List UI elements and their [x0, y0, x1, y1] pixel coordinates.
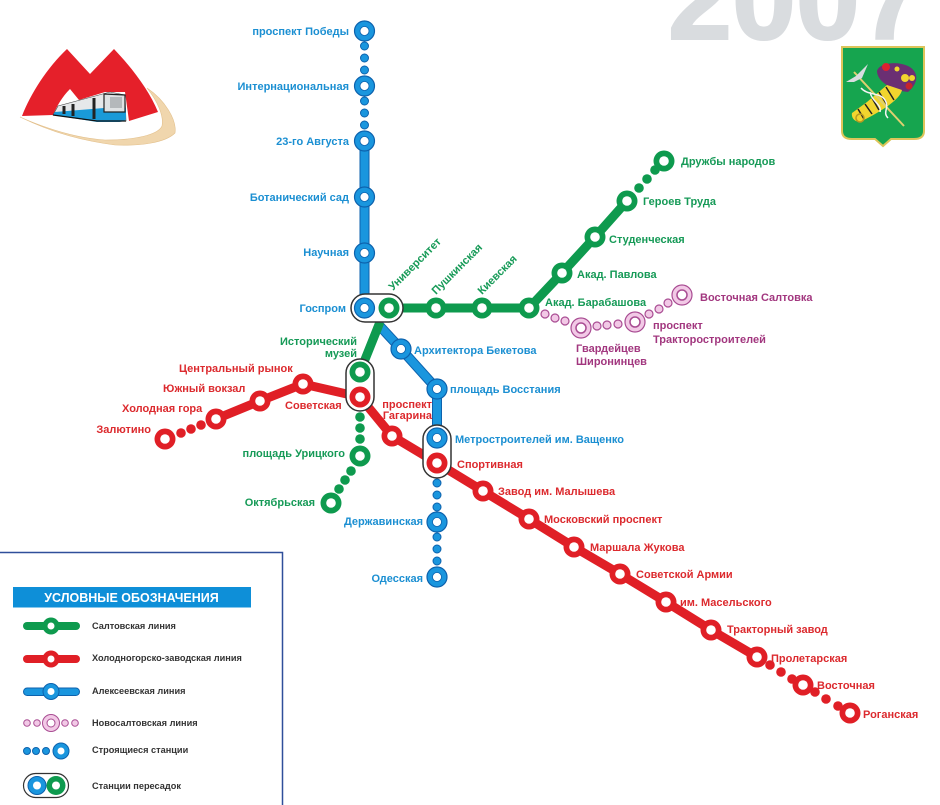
- station labels: pink line: Гвардейцев: [576, 343, 641, 355]
- legend: interchange stations: Станции пересадок: [92, 781, 181, 791]
- station labels: pink line: [576, 292, 813, 368]
- coat of arms of Kharkiv: [842, 47, 924, 146]
- station labels: green line: Студенческая: [609, 234, 685, 246]
- station labels: red line: Маршала Жукова: [590, 542, 685, 554]
- station labels: blue line: Интернациональная: [238, 81, 349, 93]
- station labels: red line: Роганская: [863, 709, 918, 721]
- interchange: Gosprom – Universitet: [351, 294, 403, 322]
- station labels: red line: им. Масельского: [680, 597, 772, 609]
- station labels: green line: Киевская: [476, 253, 520, 297]
- station labels: green line: [243, 156, 775, 509]
- station labels: red line: Залютино: [96, 424, 151, 436]
- station labels: red line: Советская: [285, 400, 342, 412]
- station labels: red line: Завод им. Малышева: [498, 486, 616, 498]
- line: Kholodnogorsko-Zavodskaya (red): [154, 374, 860, 724]
- station labels: red line: [96, 363, 918, 721]
- station labels: pink line: Восточная Салтовка: [700, 292, 813, 304]
- station labels: pink line: Широнинцев: [576, 356, 647, 368]
- legend: Novosaltovskaya line: Новосалтовская линия: [92, 718, 198, 728]
- station labels: pink line: Тракторостроителей: [653, 334, 766, 346]
- interchange: Metrostroiteley – Sportivnaya: [423, 425, 451, 478]
- station labels: green line: музей: [325, 348, 357, 360]
- station labels: red line: Спортивная: [457, 459, 523, 471]
- legend: Kholodnogorsko-Zavodskaya line: Холодногорско-заводская линия: [92, 653, 242, 663]
- station labels: blue line: [238, 26, 624, 585]
- station labels: red line: Московский проспект: [544, 514, 663, 526]
- logo swoosh: [20, 88, 175, 145]
- line: Saltovskaya (green): [320, 150, 674, 514]
- station labels: red line: проспект: [382, 399, 433, 411]
- station labels: red line: Пролетарская: [771, 653, 847, 665]
- legend heading: УСЛОВНЫЕ ОБОЗНАЧЕНИЯ: [44, 591, 219, 605]
- legend: Kholodnogorsko-Zavodskaya line: [23, 650, 242, 668]
- cornucopia: [852, 85, 902, 122]
- station labels: green line: Октябрьская: [245, 497, 315, 509]
- legend: Alekseevskaya line: Алексеевская линия: [92, 686, 185, 696]
- station labels: blue line: Архитектора Бекетова: [414, 345, 537, 357]
- line: Alekseevskaya (blue): [354, 21, 447, 587]
- interchange: Istoricheskiy muzey – Sovetskaya: [346, 359, 374, 411]
- legend: stations under construction: [24, 743, 189, 759]
- station labels: green line: Героев Труда: [643, 196, 717, 208]
- station labels: green line: Акад. Барабашова: [545, 297, 647, 309]
- station labels: red line: Южный вокзал: [163, 383, 245, 395]
- legend: stations under construction: Строящиеся станции: [92, 745, 189, 755]
- station labels: red line: Гагарина: [383, 410, 433, 422]
- station labels: green line: площадь Урицкого: [243, 448, 345, 460]
- station labels: blue line: Державинская: [344, 516, 423, 528]
- station labels: green line: Исторический: [280, 336, 357, 348]
- legend: Alekseevskaya line: [24, 684, 185, 700]
- logo train: [53, 92, 126, 122]
- station labels: blue line: Метростроителей им. Ващенко: [455, 434, 624, 446]
- panel: legend: [0, 552, 282, 805]
- shield: [842, 47, 924, 146]
- caduceus: [846, 64, 904, 126]
- station labels: red line: Тракторный завод: [727, 624, 828, 636]
- station labels: red line: Советской Армии: [636, 569, 733, 581]
- station labels: blue line: проспект Победы: [252, 26, 349, 38]
- legend: Novosaltovskaya line: [24, 714, 198, 732]
- station labels: blue line: Одесская: [371, 573, 423, 585]
- station labels: green line: Акад. Павлова: [577, 269, 657, 281]
- station labels: red line: Центральный рынок: [179, 363, 293, 375]
- metro logo: [20, 49, 175, 145]
- legend: Saltovskaya line: [23, 618, 176, 634]
- station labels: green line: Пушкинская: [430, 242, 485, 297]
- station labels: green line: Дружбы народов: [681, 156, 775, 168]
- station labels: blue line: площадь Восстания: [450, 384, 561, 396]
- logo letter M: [22, 49, 158, 121]
- station labels: blue line: 23-го Августа: [276, 136, 350, 148]
- legend: Saltovskaya line: Салтовская линия: [92, 621, 176, 631]
- station labels: blue line: Научная: [303, 247, 349, 259]
- station labels: red line: Холодная гора: [122, 403, 203, 415]
- station labels: green line: Университет: [387, 235, 444, 293]
- station labels: red line: Восточная: [817, 680, 875, 692]
- line: Novosaltovskaya (pink): [541, 285, 692, 338]
- legend: interchange stations: [24, 774, 181, 798]
- station labels: blue line: Госпром: [300, 303, 346, 315]
- station labels: pink line: проспект: [653, 320, 703, 332]
- legend heading: [13, 587, 251, 608]
- station labels: blue line: Ботанический сад: [250, 192, 349, 204]
- fruit: [877, 63, 916, 92]
